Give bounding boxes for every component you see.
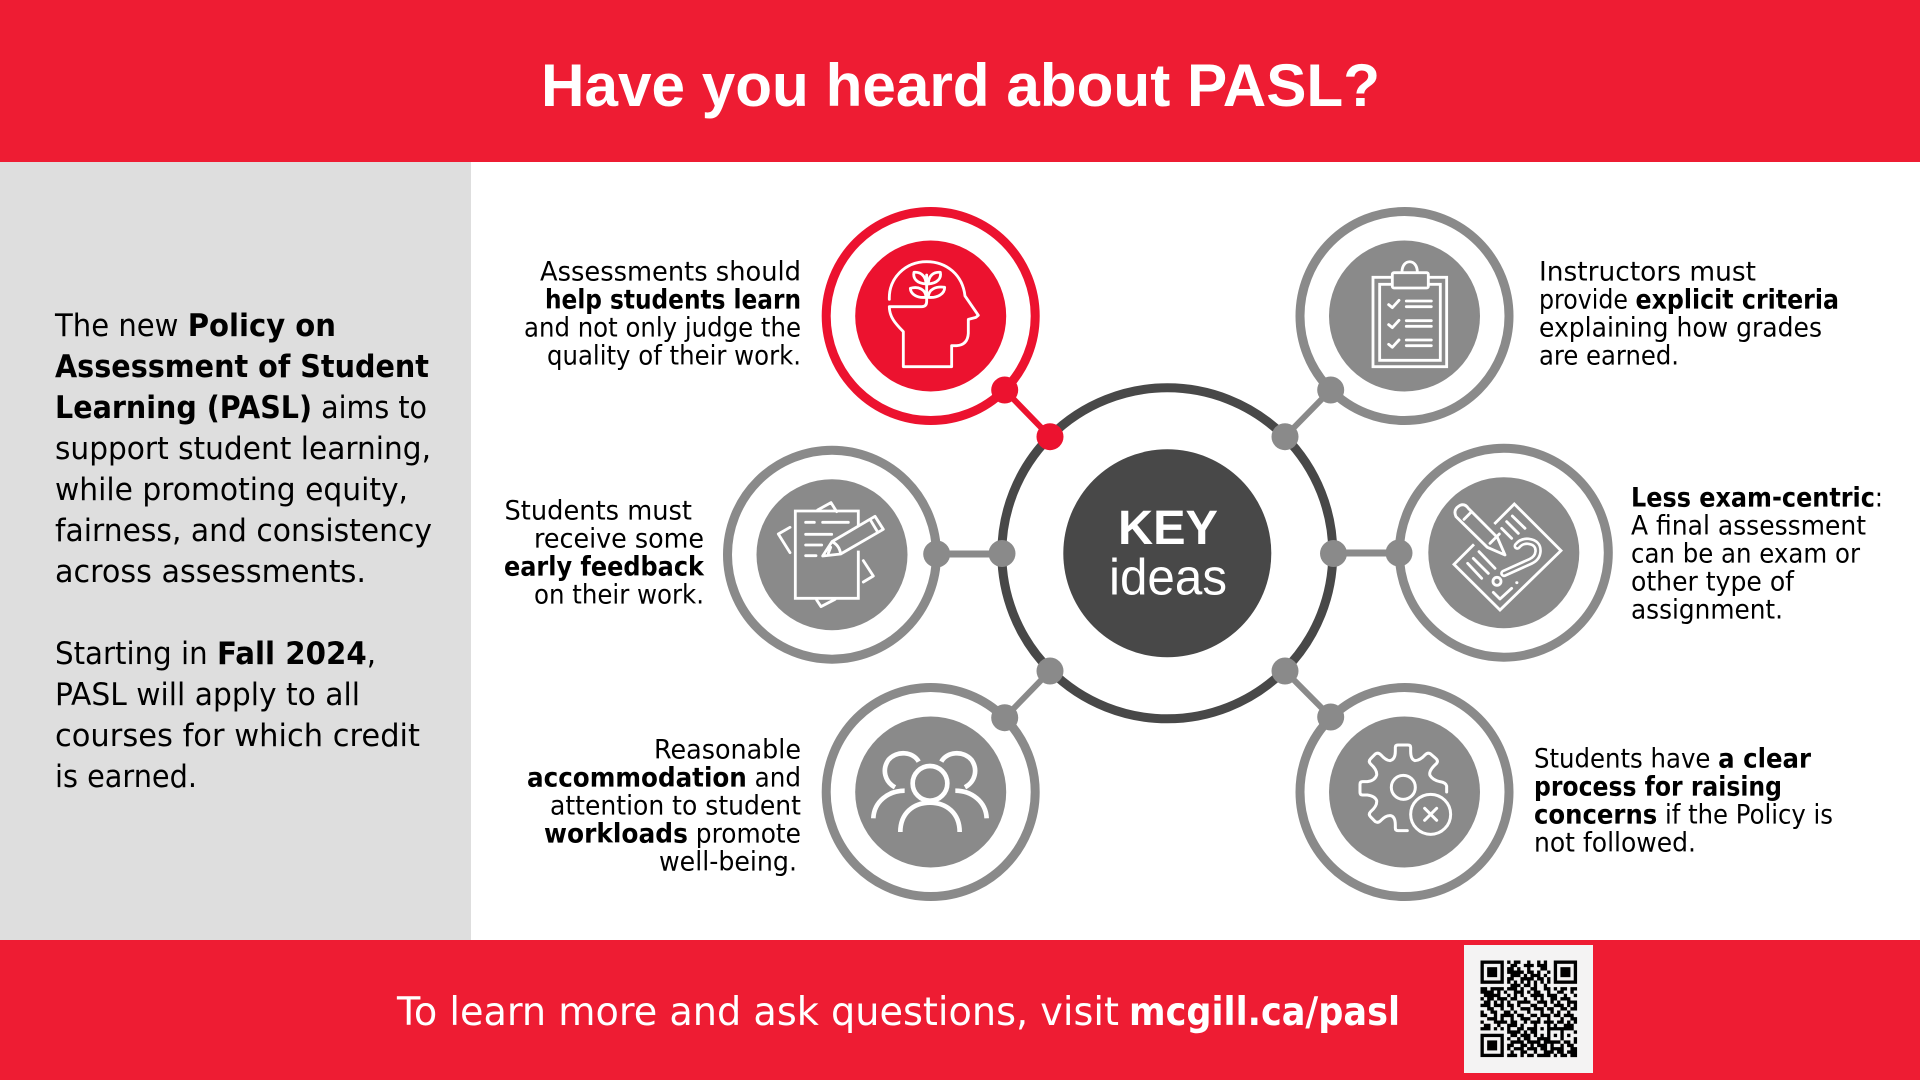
text: accommodation and workloads: workloads promote [544,818,801,849]
text: accommodation and workloads: well-being. [659,846,797,877]
panel: policy introduction sidebar: fairness, and consistency [55,513,432,549]
card: help students learn [826,212,1064,450]
title: Have you heard about PASL? [541,52,1380,119]
text: early feedback: early feedback [504,552,705,583]
panel: policy introduction sidebar: is earned. [55,759,197,795]
text: accommodation and workloads: accommodation and [527,762,801,793]
card: early feedback [728,450,1016,659]
panel: policy introduction sidebar: courses for which credit [55,718,420,754]
central hub: KEY ideas: ideas [1109,548,1227,606]
text: raising concerns: process for raising [1534,772,1782,802]
footer call to action: mcgill.ca/pasl [1129,990,1400,1035]
text: accommodation and workloads: attention to student [550,790,801,821]
central hub: KEY ideas [1002,388,1333,719]
panel: policy introduction sidebar: Starting in Fall 2024, [55,636,376,672]
text: raising concerns [1534,744,1833,858]
panel: policy introduction sidebar: Learning (PASL) aims to [55,390,427,426]
text: less exam-centric: can be an exam or [1631,538,1860,569]
text: accommodation and workloads [527,734,801,877]
text: early feedback [504,496,705,611]
central hub: KEY ideas: KEY [1118,502,1218,555]
card: raising concerns [1272,658,1509,896]
text: raising concerns: not followed. [1534,828,1696,858]
text: explicit criteria: are earned. [1539,340,1679,371]
text: help students learn: and not only judge the [524,312,801,343]
text: less exam-centric [1631,482,1883,625]
text: explicit criteria [1539,256,1839,371]
card: explicit criteria [1272,212,1509,450]
footer band [0,940,1920,1080]
icon: notes and pencil [778,503,883,607]
header band [0,0,1920,162]
icon: exam page with question mark [1454,504,1561,610]
text: help students learn [524,256,801,371]
text: early feedback: on their work. [534,580,704,611]
text: explicit criteria: explaining how grades [1539,312,1822,343]
panel: policy introduction sidebar: while promoting equity, [55,472,408,508]
icon: head with plant [889,262,978,367]
text: raising concerns: Students have a clear [1534,744,1811,774]
text: early feedback: receive some [534,524,704,555]
text: explicit criteria: provide explicit criteria [1539,284,1839,315]
card: less exam-centric [1320,448,1608,657]
text: explicit criteria: Instructors must [1539,256,1756,287]
text: less exam-centric: A final assessment [1631,510,1866,541]
icon: group of people [873,753,987,832]
text: help students learn: help students learn [545,284,801,315]
panel: policy introduction sidebar: across assessments. [55,554,366,590]
icon: clipboard checklist [1373,262,1447,367]
icon: gear with cross [1360,745,1451,834]
text: accommodation and workloads: Reasonable [654,734,801,765]
panel: policy introduction sidebar: The new Policy on [54,308,336,344]
text: help students learn: Assessments should [540,256,801,287]
text: less exam-centric: other type of [1631,566,1795,597]
text: help students learn: quality of their work. [547,340,801,371]
panel: policy introduction sidebar: support student learning, [55,431,431,467]
text: less exam-centric: Less exam-centric: [1631,482,1883,513]
panel: policy introduction sidebar: PASL will apply to all [55,677,360,713]
footer call to action: To learn more and ask questions, visit [396,990,1119,1035]
card: accommodation and workloads [826,658,1064,896]
text: early feedback: Students must [504,496,692,527]
panel: policy introduction sidebar: Assessment of Student [55,349,429,385]
text: less exam-centric: assignment. [1631,594,1783,625]
text: raising concerns: concerns if the Policy is [1534,800,1833,830]
QR code [1464,945,1593,1073]
panel: policy introduction sidebar [0,162,471,940]
